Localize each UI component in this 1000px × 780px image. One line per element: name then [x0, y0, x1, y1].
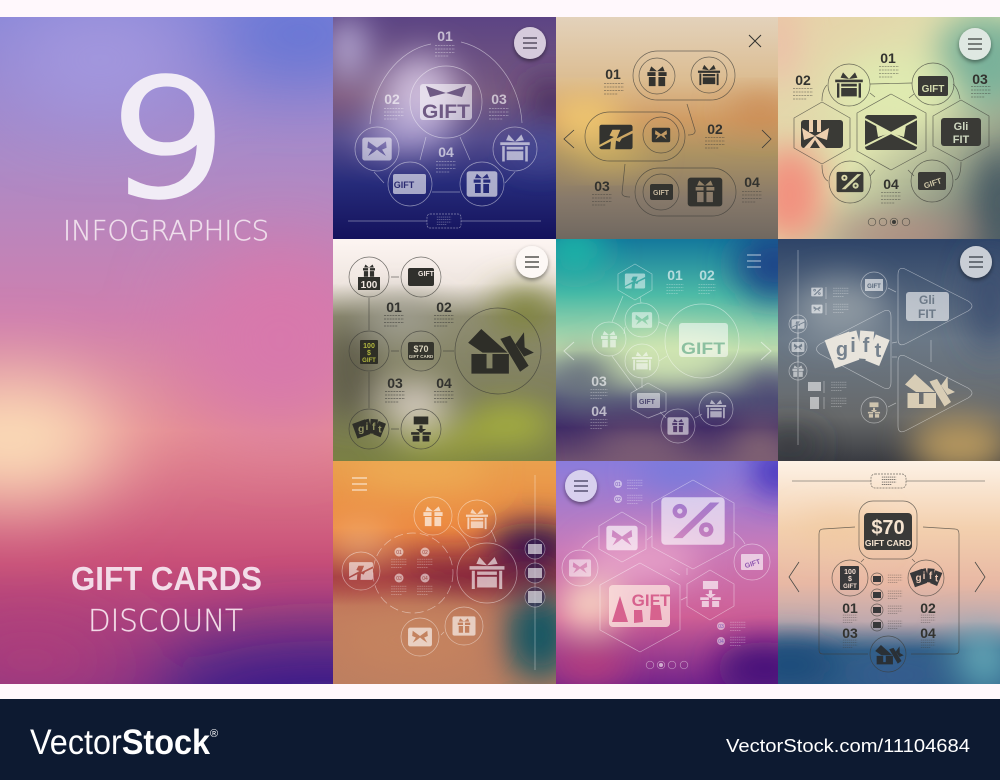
circle: 100 dollar gift [349, 331, 389, 371]
heading: gift cards: GIFT CARDS [71, 560, 262, 597]
circle with percent card [829, 161, 871, 203]
heading: discount: DISCOUNT [88, 604, 243, 639]
circle: gift cards fan [349, 409, 389, 449]
caption lines [391, 559, 433, 594]
big circle: gift [665, 304, 739, 378]
circle with gift card text: GIFT [922, 84, 944, 95]
circle with tilted gift card [734, 544, 770, 580]
side rule [534, 475, 536, 670]
circle: tilted gift card: GIFT [867, 284, 881, 290]
node icon: wide gift [625, 344, 659, 378]
triangle left with gift cards fan [816, 310, 891, 389]
menu button [516, 246, 548, 278]
timeline rule [797, 250, 799, 445]
circle: 100 dollar gift: 100 [844, 569, 856, 576]
circle: gift cards fan: t [935, 574, 939, 584]
hexagon with percent card [652, 480, 734, 569]
dashed orbit [373, 533, 453, 613]
image url: VectorStock.com/11104684 [726, 736, 970, 756]
pill two with ribbon cards [585, 112, 685, 161]
labels 01 to 04: 04 [438, 144, 454, 160]
step icon: gift text card: GIFT [394, 180, 415, 190]
numbered steps [394, 548, 430, 582]
circle with bow card [562, 550, 598, 586]
hexagon right with gift fit card [933, 100, 989, 161]
small icon column [871, 573, 883, 631]
labels 01 to 04: 02 [795, 72, 811, 88]
chevrons [564, 130, 771, 148]
circle: open gift [870, 636, 906, 672]
hexagon right with gift fit card: Gli [954, 121, 968, 133]
blob icon: large table gift [457, 543, 517, 603]
node icon: gift box [592, 322, 626, 356]
numbered captions: 04 [718, 639, 724, 645]
node icon: ribbon card [618, 264, 652, 300]
arrows [441, 526, 496, 635]
flow arrows [622, 104, 695, 197]
labels 01 to 04: 03 [491, 91, 507, 107]
heading: infographics: INFOGRAPHICS [63, 214, 269, 247]
circle: 70 dollar gift card: GIFT CARD [409, 354, 434, 359]
labels 01 to 04: 04 [744, 174, 760, 190]
panel: branching network, teal [545, 226, 815, 461]
circle: gift bags card [401, 257, 441, 297]
labels 01 to 04: 03 [387, 375, 403, 391]
blob icon: bow card [401, 618, 439, 656]
step icon: wide gift [493, 127, 537, 171]
node icon: boxed gift card [661, 409, 695, 443]
circle: 100 dollar gift: 100 [363, 343, 375, 350]
circle with wide gift [828, 64, 870, 106]
panel: pill flow, amber [556, 17, 778, 239]
labels 01 to 04 [591, 267, 715, 419]
circle: gift cards fan: f [372, 422, 376, 433]
hexagon right with gift fit card: FIT [953, 134, 970, 146]
hexagon with bow card [599, 512, 646, 562]
side rail icons [525, 539, 545, 607]
labels 01 to 04: 02 [920, 600, 936, 616]
numbered steps: 03 [396, 576, 402, 582]
panel: circle network, bokeh green [324, 239, 559, 461]
circle: 100 dollar gift [832, 560, 868, 596]
panel: orbit layout, sunset [320, 454, 581, 684]
close icon [749, 35, 761, 47]
panel: left cover [0, 17, 333, 684]
connector lines [819, 527, 959, 654]
triangle top with gift fit card: FIT [918, 307, 937, 321]
rounded square with 70 dollar card: $70 [871, 517, 905, 539]
labels 01 to 04: 01 [605, 66, 621, 82]
hexagon centre with bow card [857, 94, 926, 170]
labels 01 to 04 [384, 28, 507, 160]
circle: 70 dollar gift card: $70 [413, 344, 429, 354]
menu lines [747, 255, 761, 267]
caption lines [384, 46, 509, 172]
labels 01 to 04: 01 [842, 600, 858, 616]
circle: 100 dollar gift: $ [848, 576, 852, 583]
panel: 70 dollar card layout, peach [740, 461, 1000, 693]
circle: card into gift [861, 397, 887, 423]
caption lines [843, 615, 935, 648]
central gift badge: GIFT [422, 102, 470, 123]
legend rows [808, 287, 849, 409]
labels 01 to 04: 01 [437, 28, 453, 44]
blob icon: ribbon card [342, 552, 380, 590]
pill one with gift icons [633, 51, 735, 100]
step icon: boxed gift card [460, 162, 504, 206]
circle: 100 dollar gift: GIFT [843, 584, 857, 590]
numbered captions: 03 [718, 624, 724, 630]
labels 01 to 04: 03 [972, 71, 988, 87]
labels 01 to 04: 02 [384, 91, 400, 107]
node icon: wide gift lower [699, 392, 733, 426]
labels 01 to 04: 04 [883, 176, 899, 192]
numbered steps: 04 [422, 576, 428, 582]
menu button [959, 28, 991, 60]
pill three with gift cards: GIFT [653, 190, 670, 197]
panel: circular gift diagram, purple [333, 17, 556, 239]
numbered captions: 02 [615, 497, 621, 503]
circle: 100 dollar gift: $ [367, 350, 371, 357]
circle with tilted gift card: GIFT [923, 176, 943, 190]
timeline icons [789, 315, 807, 380]
hexagon with shopping bags gift card: GIFT [632, 591, 671, 610]
pagination dots [646, 661, 688, 669]
triangle left with gift cards fan: f [863, 335, 870, 357]
numbered captions: 01 [615, 482, 621, 488]
rounded square with 70 dollar card [859, 501, 917, 559]
labels 01 to 04 [795, 50, 988, 192]
registered mark: ® [210, 728, 218, 740]
labels 01 to 04: 03 [591, 373, 607, 389]
triangle left with gift cards fan: i [850, 335, 856, 357]
caption lines [592, 84, 762, 205]
blob icon: wide gift [458, 500, 496, 538]
circle: gift cards fan: i [365, 422, 368, 433]
labels 01 to 04: 03 [594, 178, 610, 194]
caption lines [793, 66, 991, 203]
node icon: gift text card [631, 383, 666, 418]
hexagon with card into gift [687, 570, 734, 620]
circle with tilted gift card: GIFT [744, 558, 762, 570]
labels 01 to 04: 03 [842, 625, 858, 641]
labels 01 to 04: 04 [436, 375, 452, 391]
labels 01 to 04: 01 [667, 267, 683, 283]
circle: 100 gift: 100 [361, 280, 378, 291]
circle with tilted gift card [911, 160, 953, 202]
labels 01 to 04: 01 [880, 50, 896, 66]
labels 01 to 04: 02 [699, 267, 715, 283]
menu button [960, 246, 992, 278]
circle: gift cards fan: f [929, 571, 933, 582]
triangle top with gift fit card [898, 268, 972, 345]
panel: triangle layout, dusk [760, 239, 1000, 473]
orbit arcs [370, 42, 522, 192]
footer rule and caption box [348, 214, 541, 228]
labels 01 to 04 [842, 600, 936, 641]
numbered steps: 01 [396, 550, 402, 556]
circle: gift cards fan [908, 560, 944, 596]
caption lines [627, 480, 746, 645]
menu button [514, 27, 546, 59]
panel: hexagon cluster, pastel [778, 17, 1000, 239]
numeral nine: 9 [107, 48, 227, 232]
circle: gift cards fan: t [378, 425, 382, 436]
triangle left with gift cards fan: t [875, 340, 882, 362]
labels 01 to 04: 02 [707, 121, 723, 137]
labels 01 to 04: 02 [436, 299, 452, 315]
menu lines [352, 478, 367, 490]
rounded square with 70 dollar card: GIFT CARD [865, 538, 911, 548]
circle: tilted gift card [861, 272, 887, 298]
connector lines [582, 532, 745, 600]
footer band [0, 699, 1000, 780]
labels 01 to 04: 04 [591, 403, 607, 419]
blob icon: boxed gift card [445, 607, 483, 645]
chevrons [564, 342, 771, 360]
circle: gift cards fan: g [915, 573, 922, 584]
central gift badge [410, 66, 482, 138]
labels 01 to 04: 01 [386, 299, 402, 315]
connector lines [798, 288, 931, 407]
labels 01 to 04 [386, 299, 452, 391]
connecting arrows [822, 83, 961, 181]
top rule and caption box [792, 474, 985, 488]
numbered captions [614, 480, 725, 645]
big circle: open gift [455, 308, 541, 394]
chevrons [789, 562, 985, 592]
blob icon: gift box [414, 497, 452, 535]
circle: gift cards fan: g [358, 424, 364, 435]
triangle lower with open gift [898, 355, 972, 432]
node icon: gift text card: GIFT [639, 399, 656, 406]
menu button [565, 470, 597, 502]
triangle left with gift cards fan: g [836, 339, 848, 361]
triangle top with gift fit card: Gli [919, 293, 935, 307]
circle: 100 gift [349, 257, 389, 297]
big circle: gift: GIFT [681, 339, 726, 358]
labels 01 to 04: 04 [920, 625, 936, 641]
circle: gift cards fan: i [923, 571, 926, 582]
caption lines [384, 316, 454, 402]
circle: 70 dollar gift card [401, 331, 441, 371]
circle: 100 dollar gift: GIFT [362, 358, 376, 364]
connector lines [612, 296, 702, 418]
hexagon with shopping bags gift card [600, 563, 680, 652]
step icon: bow card [355, 127, 399, 171]
connecting arrows [369, 277, 454, 429]
node icon: bow card [625, 303, 659, 337]
hexagon left with bow card [794, 102, 850, 164]
small icon captions [888, 575, 902, 629]
pill three with gift cards [635, 168, 736, 216]
circle with gift card text [912, 63, 954, 105]
circle: gift bags card: GIFT [418, 271, 435, 278]
circle: card into gift [401, 409, 441, 449]
panel: hexagon percent, violet [550, 448, 815, 694]
labels 01 to 04 [594, 66, 760, 194]
step icon: gift text card [388, 162, 432, 206]
brand logo: VectorStock [30, 723, 210, 762]
numbered steps: 02 [422, 550, 428, 556]
caption lines [590, 284, 716, 428]
pagination dots [868, 218, 910, 226]
